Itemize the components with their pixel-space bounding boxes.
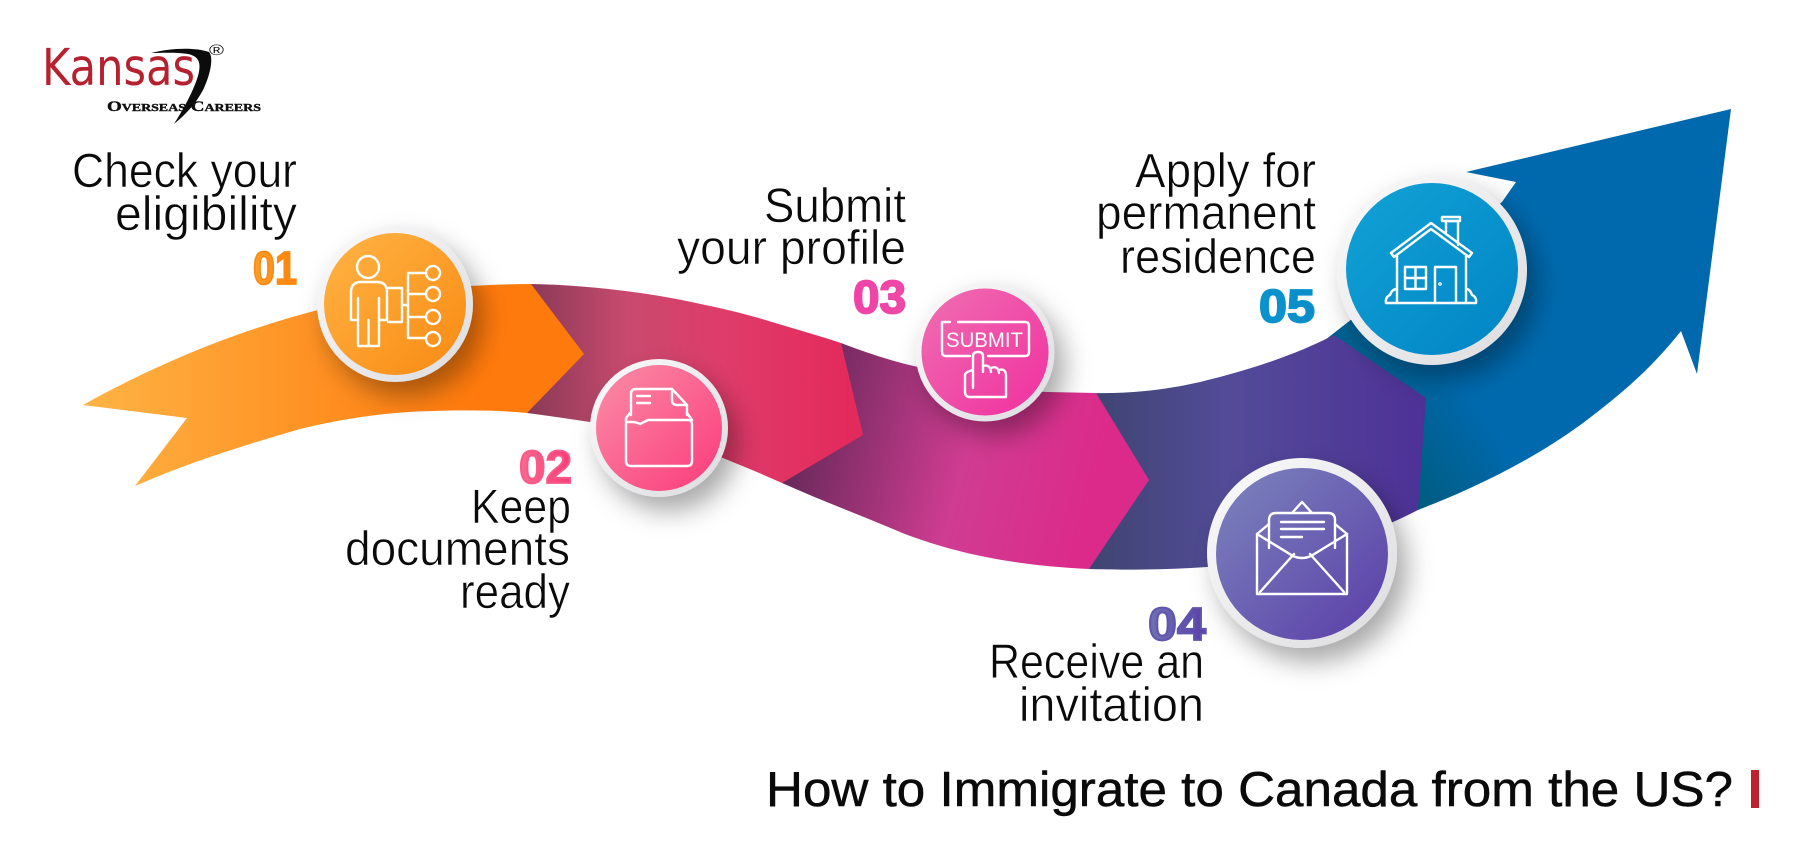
step 03 number: 03 [853,271,906,323]
step 02 text line 2: documents [345,523,570,576]
step 04 number: 04 [1148,598,1206,650]
step 01 text line 2: eligibility [115,188,297,241]
step 05 label [1096,145,1316,332]
icon: open envelope [1257,502,1347,594]
step 05 number: 05 [1259,280,1315,332]
icon: house [1386,217,1476,303]
step 01 circle with org chart icon [317,226,473,382]
circle fill [922,288,1048,416]
step 02 circle with folder icon [590,359,728,497]
step 02 text line 3: ready [460,566,570,619]
circle fill [1216,468,1388,640]
step 05 text line 2: permanent [1096,187,1316,240]
step 02 text: Keep [471,481,571,534]
circle ring [916,282,1054,422]
arrow section: magenta [782,343,1149,569]
icon: person with network [351,256,440,346]
step 03 circle with submit icon [916,282,1054,422]
arrow section: purple [1089,335,1426,570]
step 04 label [989,598,1206,732]
step 05 text line 3: residence [1120,231,1316,284]
arrow section: pink [527,284,863,483]
step 05 circle with house icon [1337,175,1527,365]
step 04 circle with envelope icon [1207,458,1397,648]
circle fill [324,233,466,375]
logo swoosh [151,49,211,124]
step 05 text: Apply for [1135,145,1316,198]
step 02 number: 02 [519,441,572,493]
title: How to Immigrate to Canada from the US? [766,763,1733,817]
title accent bar [1751,770,1759,808]
circle ring [1337,175,1527,365]
circle fill [1346,183,1518,355]
circle ring [1207,458,1397,648]
logo tagline: Overseas Careers [107,99,261,115]
step 04 text: Receive an [989,636,1204,689]
step 03 label [677,180,906,323]
step 01 number: 01 [253,242,297,294]
logo: Kansas Overseas Careers [42,39,261,124]
icon: folder with document [626,389,692,466]
arrow section: orange tail [83,284,584,486]
logo wordmark: Kansas [42,39,195,98]
step 01 label [72,145,297,294]
step 04 text line 2: invitation [1019,679,1204,732]
step 03 text line 2: your profile [677,222,906,275]
circle fill [596,365,722,491]
arrow section: blue head [1325,109,1731,510]
logo registered mark: ® [209,42,224,59]
step 02 label [345,441,572,619]
step 01 text: Check your [72,145,297,198]
arrow: multi-coloured ribbon [83,109,1731,570]
icon: submit button and hand: SUBMIT [946,329,1023,352]
circle ring [590,359,728,497]
circle ring [317,226,473,382]
step 03 text: Submit [764,180,906,233]
